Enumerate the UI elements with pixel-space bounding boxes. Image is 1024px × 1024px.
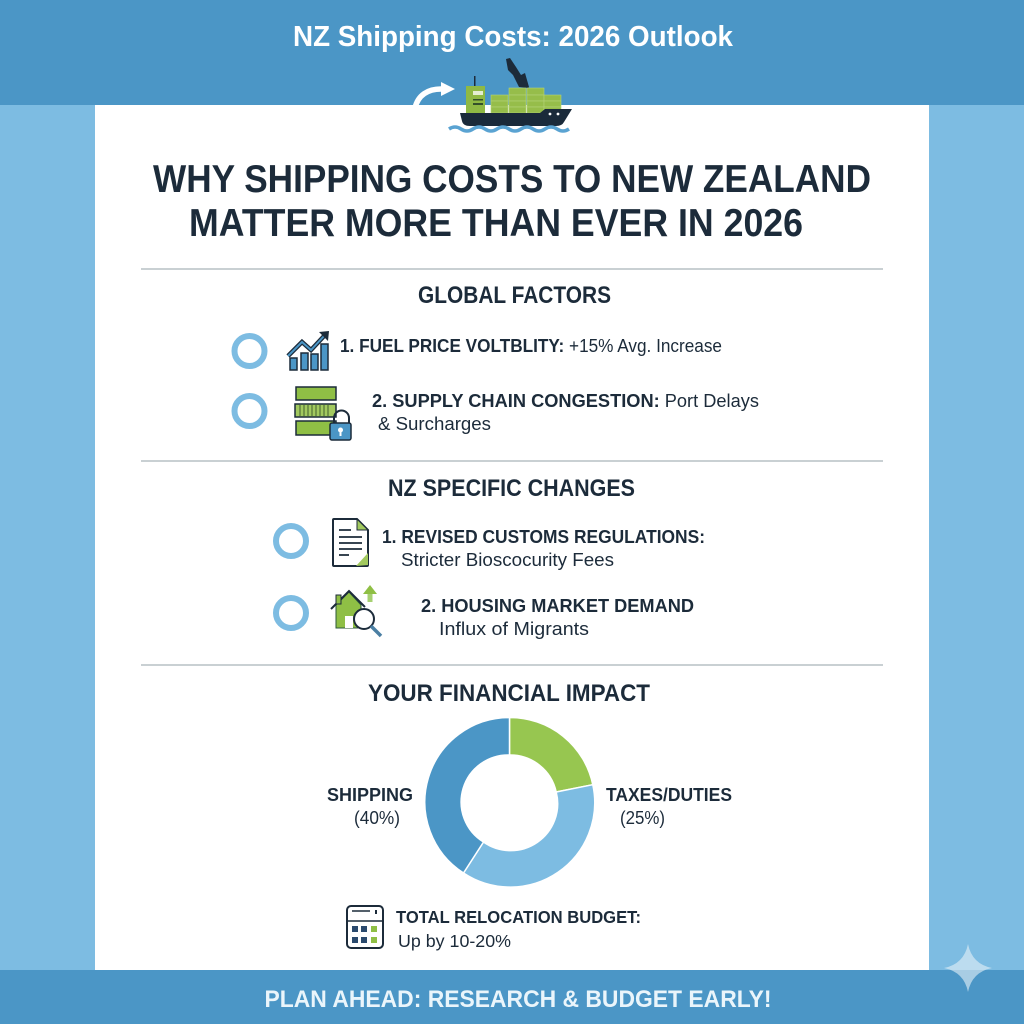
bullet ring 2: [234, 396, 264, 426]
section: financial impact: [141, 664, 883, 951]
total budget text: TOTAL RELOCATION BUDGET:: [396, 907, 641, 927]
change 1 text: [382, 526, 705, 570]
ship bridge tower: [466, 76, 485, 114]
heading: global factors: GLOBAL FACTORS: [418, 282, 611, 309]
heading: your financial impact: YOUR FINANCIAL IMPACT: [368, 680, 650, 707]
ship hull: [460, 109, 572, 126]
label: shipping: [327, 784, 413, 828]
smoke plume: [506, 58, 529, 88]
total budget text: Up by 10-20%: [398, 931, 511, 951]
icon: arrow: [415, 82, 455, 108]
main heading: [153, 158, 871, 245]
label: taxes and duties: TAXES/DUTIES: [606, 784, 732, 805]
icon: containers with padlock: [295, 387, 351, 440]
footer band: [0, 970, 1024, 1024]
factor 2 text: [372, 390, 759, 434]
main heading: WHY SHIPPING COSTS TO NEW ZEALAND: [153, 158, 871, 201]
footer call to action: PLAN AHEAD: RESEARCH & BUDGET EARLY!: [264, 986, 772, 1013]
change 2 text: [421, 595, 694, 639]
waves: [449, 127, 569, 131]
ship containers: [491, 88, 561, 113]
label: shipping: (40%): [354, 807, 400, 828]
label: taxes and duties: [606, 784, 732, 828]
change 1 text: Stricter Bioscocurity Fees: [401, 549, 614, 570]
factor 2 text: & Surcharges: [378, 413, 491, 434]
icon: cargo ship: [449, 58, 572, 131]
main heading: MATTER MORE THAN EVER IN 2026: [189, 202, 803, 245]
label: taxes and duties: (25%): [620, 807, 665, 828]
header band: [0, 0, 1024, 105]
change 1 text: 1. REVISED CUSTOMS REGULATIONS:: [382, 526, 705, 547]
icon: house with magnifier: [331, 585, 381, 636]
factor 2 text: 2. SUPPLY CHAIN CONGESTION: Port Delays: [372, 390, 759, 411]
change 2 text: Influx of Migrants: [439, 618, 589, 639]
icon: rising bar chart: [288, 331, 329, 370]
heading: NZ specific changes: NZ SPECIFIC CHANGES: [388, 475, 635, 502]
donut chart: [425, 717, 595, 887]
icon: calculator: [347, 906, 383, 948]
bullet ring 1: [234, 336, 264, 366]
header title: NZ Shipping Costs: 2026 Outlook: [293, 21, 734, 53]
factor 1 text: 1. FUEL PRICE VOLTBLITY: +15% Avg. Increase: [340, 335, 722, 356]
section: NZ specific changes: [141, 460, 883, 639]
white content panel: [95, 105, 929, 970]
section: global factors: [141, 268, 883, 440]
icon: sparkle: [944, 944, 992, 992]
change 2 text: 2. HOUSING MARKET DEMAND: [421, 595, 694, 616]
bullet ring 2: [276, 598, 306, 628]
bullet ring 1: [276, 526, 306, 556]
total budget text: [396, 907, 641, 951]
icon: document: [333, 519, 368, 566]
label: shipping: SHIPPING: [327, 784, 413, 805]
